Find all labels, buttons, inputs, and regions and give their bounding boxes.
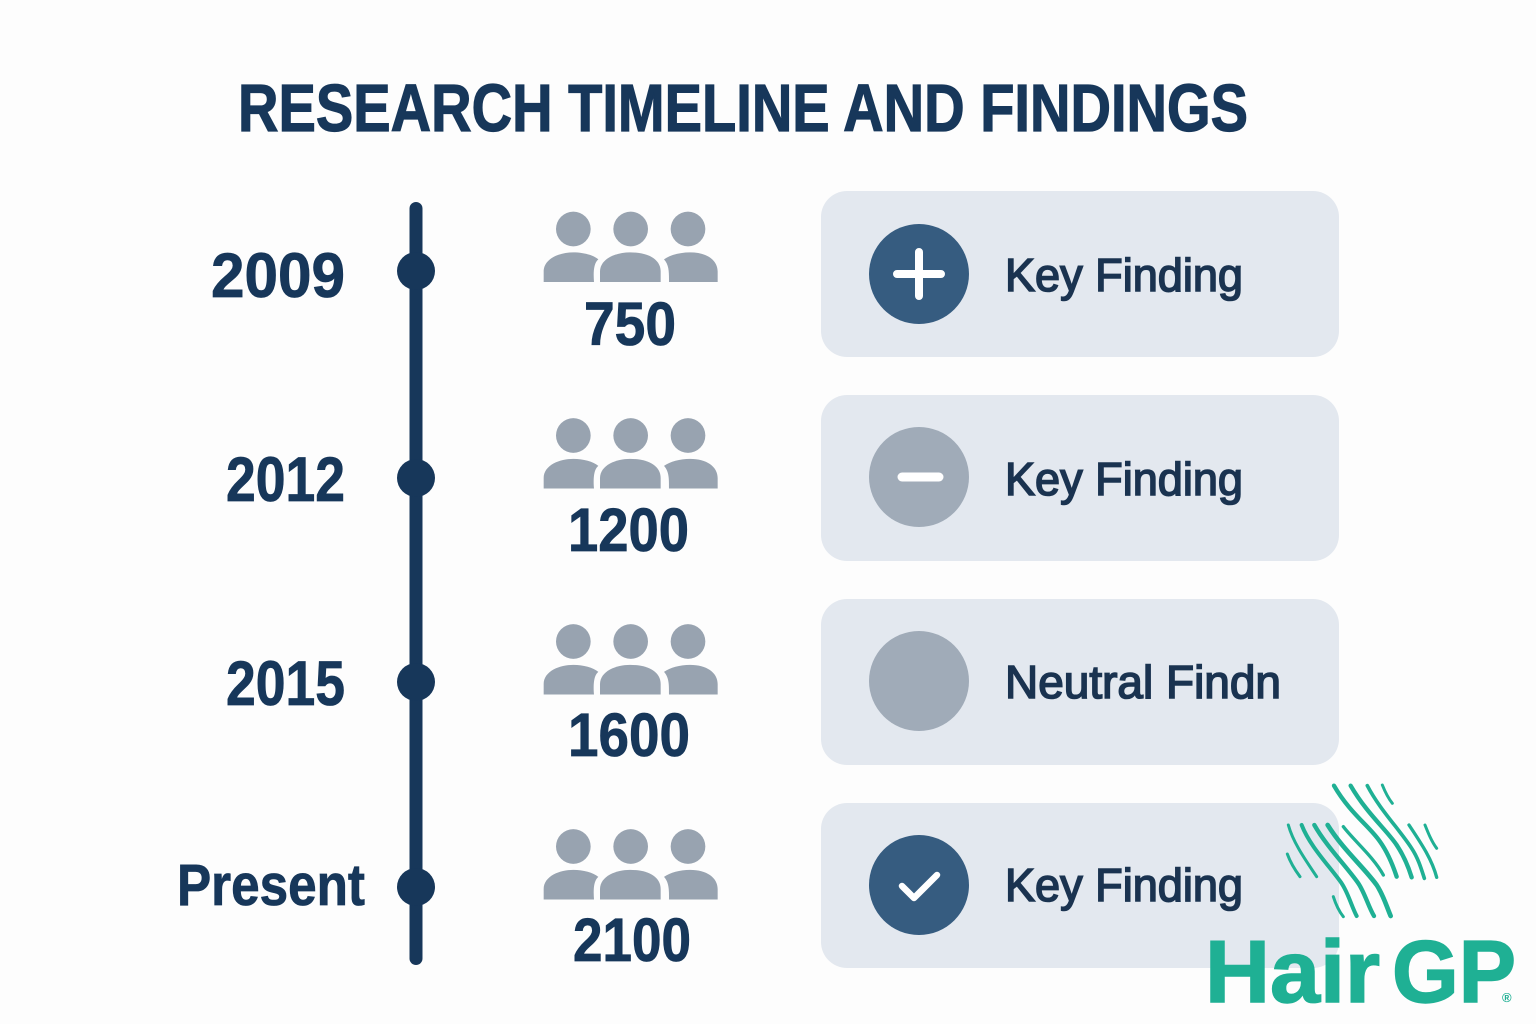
finding text: Key Finding xyxy=(1005,859,1243,911)
logo wordmark: Hair: Hair xyxy=(1205,922,1380,1021)
logo: Hair GP xyxy=(1205,785,1516,1021)
icon: participants 2015 xyxy=(544,624,718,694)
panel: finding 2009 xyxy=(821,191,1339,357)
title: RESEARCH TIMELINE AND FINDINGS xyxy=(238,71,1248,146)
year: 2012: 2012 xyxy=(226,445,345,515)
icon: neutral circle xyxy=(869,631,969,731)
icon: check xyxy=(869,835,969,935)
year: 2009: 2009 xyxy=(211,241,345,311)
logo wordmark: GP: GP xyxy=(1392,922,1516,1021)
finding text: Key Finding xyxy=(1005,453,1243,505)
panel: finding present xyxy=(821,803,1339,968)
year: 2015: 2015 xyxy=(226,649,345,719)
icon: participants 2012 xyxy=(544,418,718,488)
finding text: Key Finding xyxy=(1005,249,1243,301)
icon: participants 2009 xyxy=(544,212,718,282)
icon: plus xyxy=(869,224,969,324)
count: 1600: 1600 xyxy=(568,701,690,769)
timeline xyxy=(397,202,435,965)
icon: minus xyxy=(869,427,969,527)
finding text: Neutral Findn xyxy=(1005,656,1281,708)
icon: hair strands xyxy=(1287,785,1437,917)
count: 750: 750 xyxy=(584,290,676,358)
panel: finding 2015 xyxy=(821,599,1339,765)
count: 1200: 1200 xyxy=(568,496,689,564)
icon: participants present xyxy=(544,829,718,899)
registered mark: ® xyxy=(1502,990,1512,1005)
panel: finding 2012 xyxy=(821,395,1339,561)
count: 2100: 2100 xyxy=(573,906,691,974)
label: present: Present xyxy=(177,853,365,918)
